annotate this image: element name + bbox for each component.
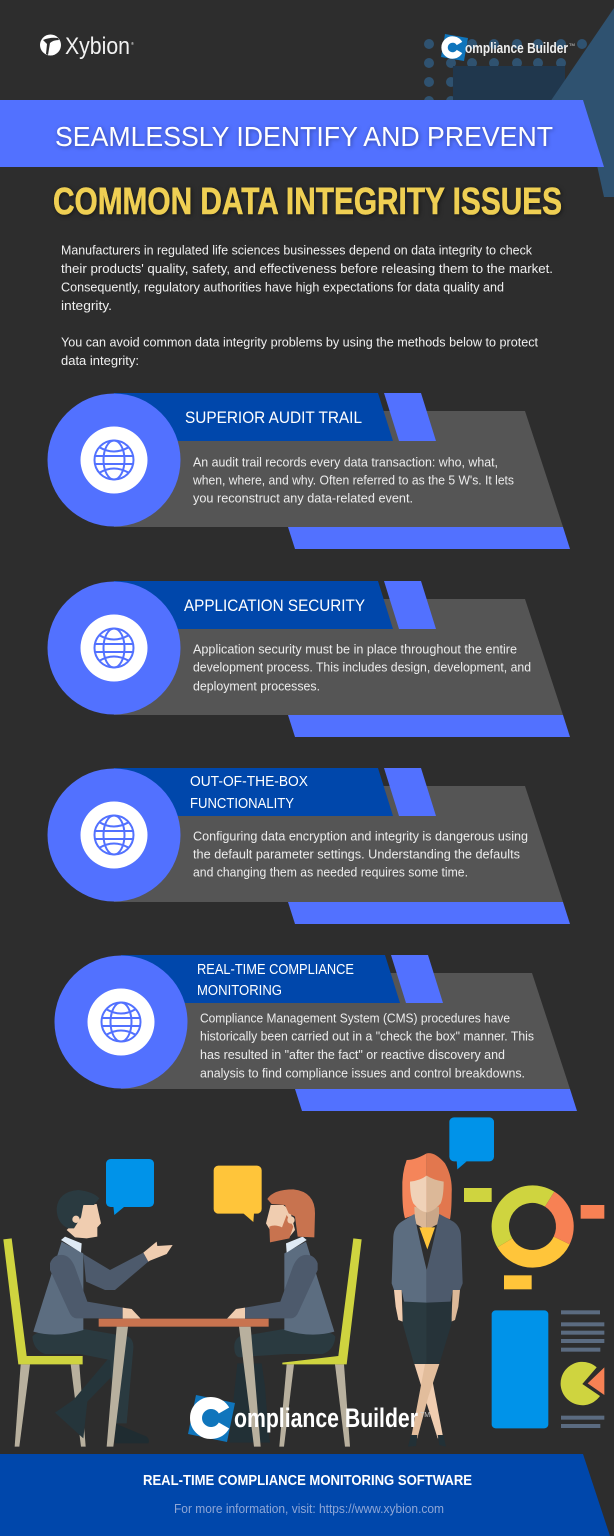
heading: out-of-the-box functionality xyxy=(190,774,308,812)
illustration: woman and charts xyxy=(392,1117,604,1447)
donut chart xyxy=(492,1185,574,1268)
heading: superior audit trail: SUPERIOR AUDIT TRAIL xyxy=(185,409,362,427)
heading: application security: APPLICATION SECURITY xyxy=(184,597,365,615)
logo: Compliance Builder top xyxy=(441,34,575,61)
speech bubble: blue xyxy=(449,1117,494,1169)
decorative header shapes xyxy=(424,8,614,197)
text: application security description: deployment processes. xyxy=(193,678,320,694)
icon: globe xyxy=(94,440,134,480)
logo: Compliance Builder top: TM xyxy=(569,42,575,47)
pie chart xyxy=(561,1362,604,1405)
logo: Xybion: Xybion xyxy=(65,33,130,60)
logo: Compliance Builder bottom: ompliance Builder xyxy=(234,1403,418,1433)
icon: globe xyxy=(94,816,134,854)
text lines xyxy=(561,1310,604,1428)
text: monitoring description: historically been carried out in a "check the box" manner. This xyxy=(200,1028,534,1044)
text: monitoring description: Compliance Management System (CMS) procedures have xyxy=(200,1010,510,1026)
intro text: integrity. xyxy=(61,298,112,313)
illustration: two men at a table xyxy=(3,1159,362,1447)
intro text: Consequently, regulatory authorities have high expectations for data quality and xyxy=(61,280,504,294)
text: monitoring description: has resulted in "after the fact" or reactive discovery and xyxy=(200,1047,505,1062)
logo: Compliance Builder bottom: TM xyxy=(420,1412,430,1419)
text: application security description: Application security must be in place throughout the entire xyxy=(193,642,517,656)
intro text: You can avoid common data integrity problems by using the methods below to protect xyxy=(61,334,538,350)
footer banner: For more information, visit: https://www.xybion.com xyxy=(174,1501,444,1516)
icon: globe xyxy=(94,628,134,668)
logo: Compliance Builder top: ompliance Builder xyxy=(465,40,568,57)
text: audit trail description: when, where, and why. Often referred to as the 5 W's. It lets xyxy=(192,472,514,488)
woman xyxy=(392,1153,463,1447)
left chair xyxy=(3,1238,86,1447)
intro text: data integrity: xyxy=(61,353,139,368)
text: application security description: development process. This includes design, development, and xyxy=(193,660,531,674)
text: functionality description: the default parameter settings. Understanding the defaults xyxy=(193,846,520,862)
intro text xyxy=(61,242,553,368)
heading: real-time compliance monitoring: REAL-TIME COMPLIANCE xyxy=(197,962,354,978)
panel: application security xyxy=(48,581,570,737)
footer banner xyxy=(0,1454,610,1536)
intro text: their products' quality, safety, and effectiveness before releasing them to the market. xyxy=(61,261,553,276)
footer banner: REAL-TIME COMPLIANCE MONITORING SOFTWARE xyxy=(143,1473,472,1489)
text: monitoring description: analysis to find compliance issues and control breakdowns. xyxy=(200,1066,525,1080)
man left xyxy=(32,1190,173,1443)
text: audit trail description xyxy=(192,454,514,506)
icon: globe xyxy=(102,1002,140,1042)
text: functionality description xyxy=(193,828,528,880)
panel: real-time compliance monitoring xyxy=(54,955,577,1111)
text: functionality description: and changing them as needed requires some time. xyxy=(193,864,468,880)
table xyxy=(99,1319,269,1447)
heading: out-of-the-box functionality: FUNCTIONALITY xyxy=(190,796,294,812)
panel: out-of-the-box functionality xyxy=(48,768,570,924)
text: audit trail description: you reconstruct any data-related event. xyxy=(193,490,413,506)
text: monitoring description xyxy=(200,1010,534,1080)
heading: real-time compliance monitoring xyxy=(197,962,354,999)
speech bubble: blue xyxy=(106,1159,154,1215)
panel: superior audit trail xyxy=(48,393,570,549)
intro text: Manufacturers in regulated life sciences businesses depend on data integrity to check xyxy=(61,242,532,258)
chart legend chips xyxy=(464,1188,604,1289)
text: application security description xyxy=(193,642,531,694)
speech bubble: yellow xyxy=(214,1166,262,1222)
logo: Compliance Builder bottom xyxy=(188,1395,430,1442)
title banner: SEAMLESSLY IDENTIFY AND PREVENT xyxy=(55,121,553,152)
heading: out-of-the-box functionality: OUT-OF-THE-BOX xyxy=(190,774,308,790)
text: audit trail description: An audit trail records every data transaction: who, what, xyxy=(193,454,498,470)
heading: real-time compliance monitoring: MONITORING xyxy=(197,983,282,999)
man right xyxy=(227,1189,335,1443)
logo: Xybion: ® xyxy=(131,41,134,46)
blue panel xyxy=(492,1310,548,1428)
title banner xyxy=(0,100,604,167)
text: functionality description: Configuring data encryption and integrity is dangerous using xyxy=(193,828,528,844)
right chair xyxy=(279,1238,362,1447)
